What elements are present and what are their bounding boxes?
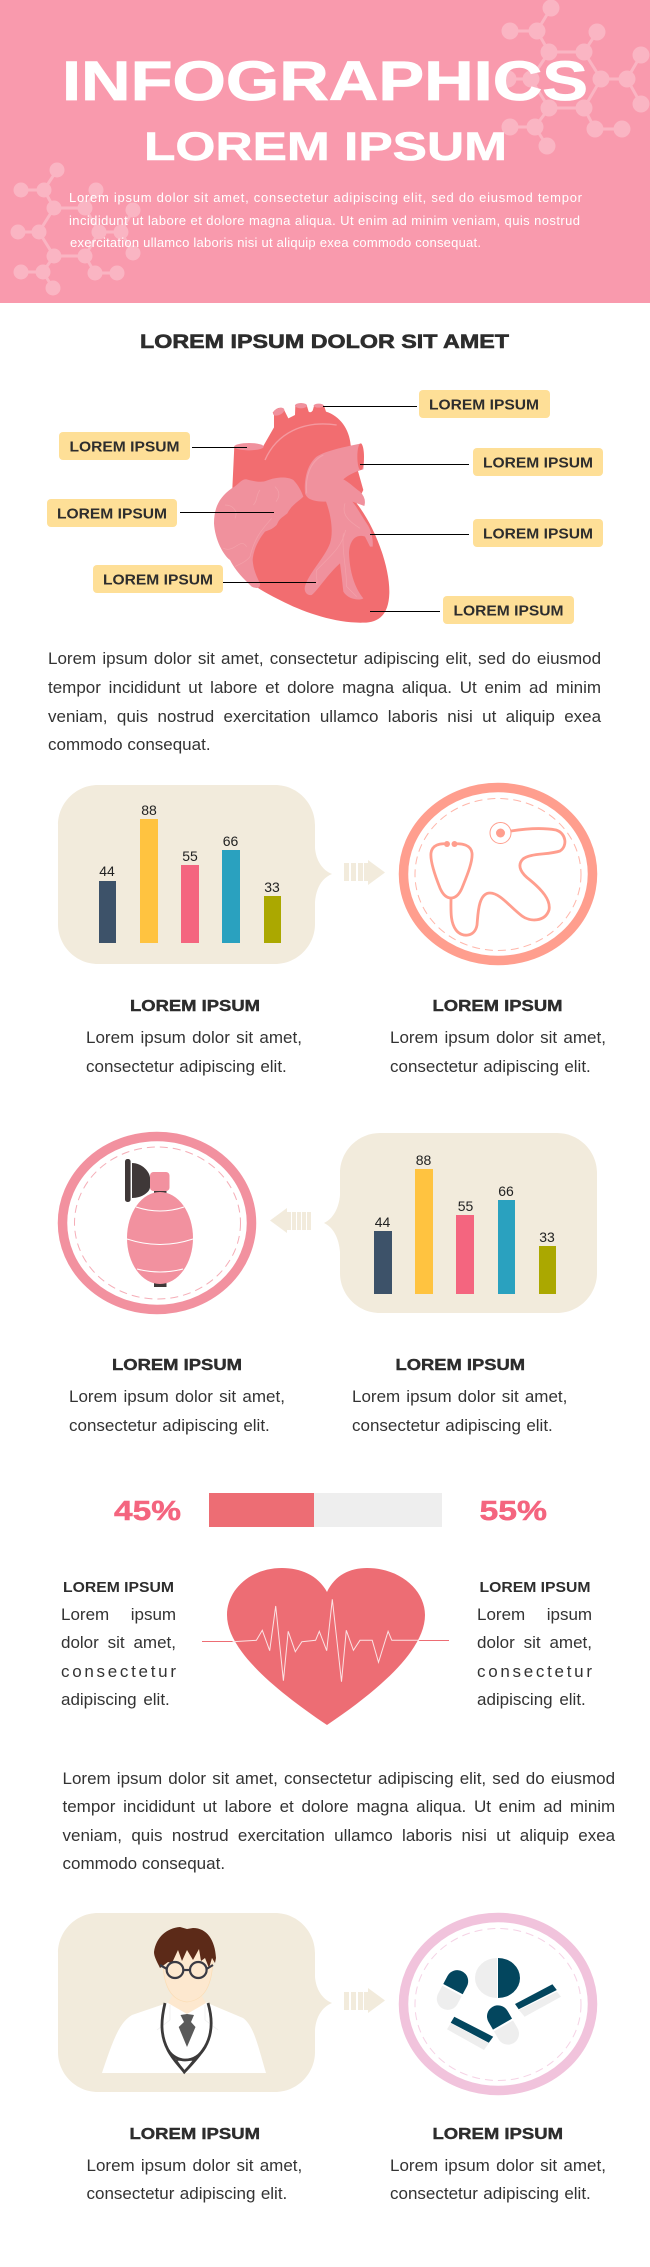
label: LOREM IPSUM	[57, 506, 167, 522]
caption left: LOREM IPSUM	[130, 998, 260, 1015]
bar chart: 55	[182, 848, 198, 864]
header text	[69, 190, 583, 250]
icon: pills circle	[404, 1918, 592, 2090]
caption left: consectetur adipiscing elit.	[69, 1416, 270, 1435]
caption right: Lorem ipsum dolor sit amet,	[352, 1387, 567, 1406]
label	[473, 519, 603, 547]
side text right: Lorem ipsum	[477, 1605, 592, 1624]
label	[443, 596, 574, 624]
bar chart: 33	[539, 1229, 555, 1245]
bar chart: 55	[458, 1198, 473, 1214]
icon: resuscitator bulb circle	[62, 1136, 252, 1310]
paragraph: commodo consequat.	[48, 735, 211, 754]
caption left: Lorem ipsum dolor sit amet,	[69, 1387, 285, 1406]
leader lines	[180, 406, 469, 612]
paragraph	[48, 649, 602, 754]
paragraph: tempor incididunt ut labore et dolore magna aliqua. Ut enim ad minim	[62, 1797, 615, 1816]
caption left	[69, 1357, 285, 1435]
caption left: Lorem ipsum dolor sit amet,	[86, 2156, 302, 2175]
side text right	[477, 1579, 592, 1709]
paragraph: Lorem ipsum dolor sit amet, consectetur adipiscing elit, sed do eiusmod	[62, 1769, 615, 1788]
caption left: consectetur adipiscing elit.	[86, 2184, 287, 2203]
side text right: consectetur	[477, 1662, 592, 1681]
caption right	[390, 2126, 606, 2203]
paragraph: veniam, quis nostrud exercitation ullamco laboris nisi ut aliquip exea	[48, 707, 602, 726]
paragraph: Lorem ipsum dolor sit amet, consectetur adipiscing elit, sed do eiusmod	[48, 649, 601, 668]
bar chart	[374, 1152, 556, 1294]
side text left: Lorem ipsum	[61, 1605, 176, 1624]
side text left: adipiscing elit.	[61, 1690, 170, 1709]
percentage left: 45%	[114, 1495, 181, 1526]
label: LOREM IPSUM	[429, 396, 539, 414]
icon: anatomical heart	[214, 403, 389, 623]
icon: heart with pulse	[202, 1568, 449, 1725]
molecule bottom left	[10, 162, 140, 296]
label	[93, 565, 223, 593]
side text right: adipiscing elit.	[477, 1690, 586, 1709]
caption right	[390, 998, 606, 1076]
panel: bar chart bubble 2	[324, 1133, 597, 1313]
caption right: consectetur adipiscing elit.	[390, 1057, 591, 1076]
label: LOREM IPSUM	[70, 438, 180, 456]
paragraph: tempor incididunt ut labore et dolore magna aliqua. Ut enim ad minim	[48, 678, 601, 697]
header text: incididunt ut labore et dolore magna aliqua. Ut enim ad minim veniam, quis nostrud	[69, 213, 580, 228]
side text left: consectetur	[61, 1662, 176, 1681]
bar chart: 66	[498, 1183, 514, 1199]
label	[473, 448, 603, 476]
subtitle: LOREM IPSUM	[144, 125, 507, 169]
arrow	[344, 1988, 385, 2013]
panel: header	[0, 0, 650, 303]
header text: exercitation ullamco laboris nisi ut aliquip exea commodo consequat.	[70, 235, 481, 250]
bar chart: 66	[223, 833, 238, 849]
bar chart	[99, 802, 281, 943]
caption right: LOREM IPSUM	[396, 1357, 525, 1374]
bar chart: 33	[264, 879, 280, 895]
caption right: Lorem ipsum dolor sit amet,	[390, 1028, 606, 1047]
arrow	[270, 1208, 311, 1233]
label	[47, 499, 177, 527]
progress bar	[209, 1493, 442, 1527]
caption right: consectetur adipiscing elit.	[352, 1416, 553, 1435]
caption right: Lorem ipsum dolor sit amet,	[390, 2156, 606, 2175]
caption left	[86, 2126, 302, 2203]
bar chart: 44	[99, 863, 115, 879]
section heading: LOREM IPSUM DOLOR SIT AMET	[140, 331, 509, 353]
bar chart: 44	[375, 1214, 390, 1230]
label: LOREM IPSUM	[454, 602, 564, 620]
icon: stethoscope circle	[404, 788, 592, 960]
paragraph: veniam, quis nostrud exercitation ullamco laboris nisi ut aliquip exea	[62, 1826, 616, 1845]
caption left	[86, 998, 302, 1076]
paragraph	[62, 1769, 616, 1873]
caption left: consectetur adipiscing elit.	[86, 1057, 287, 1076]
caption right: LOREM IPSUM	[432, 2126, 563, 2143]
caption left: LOREM IPSUM	[130, 2126, 260, 2143]
header text: Lorem ipsum dolor sit amet, consectetur adipiscing elit, sed do eiusmod tempor	[69, 190, 583, 205]
caption right: LOREM IPSUM	[432, 998, 562, 1015]
caption right: consectetur adipiscing elit.	[390, 2184, 591, 2203]
label: LOREM IPSUM	[103, 572, 213, 588]
icon: doctor	[102, 1927, 266, 2073]
label	[59, 432, 190, 460]
side text right: LOREM IPSUM	[480, 1579, 590, 1596]
label	[419, 390, 550, 418]
bar chart: 88	[141, 802, 157, 818]
caption right	[352, 1357, 567, 1435]
percentage right: 55%	[480, 1495, 547, 1526]
label: LOREM IPSUM	[483, 454, 593, 472]
molecule top right	[500, 0, 650, 154]
side text left	[61, 1579, 176, 1709]
side text left: dolor sit amet,	[61, 1633, 176, 1652]
label: LOREM IPSUM	[483, 526, 593, 542]
title: INFOGRAPHICS	[62, 49, 588, 112]
panel: bar chart bubble 1	[58, 785, 332, 964]
caption left: Lorem ipsum dolor sit amet,	[86, 1028, 302, 1047]
bar chart: 88	[416, 1152, 431, 1168]
panel: doctor bubble	[58, 1913, 332, 2092]
heart anatomy diagram	[47, 390, 603, 624]
caption left: LOREM IPSUM	[112, 1357, 242, 1374]
side text right: dolor sit amet,	[477, 1633, 592, 1652]
arrow	[344, 860, 385, 885]
paragraph: commodo consequat.	[62, 1854, 225, 1873]
side text left: LOREM IPSUM	[63, 1579, 174, 1596]
